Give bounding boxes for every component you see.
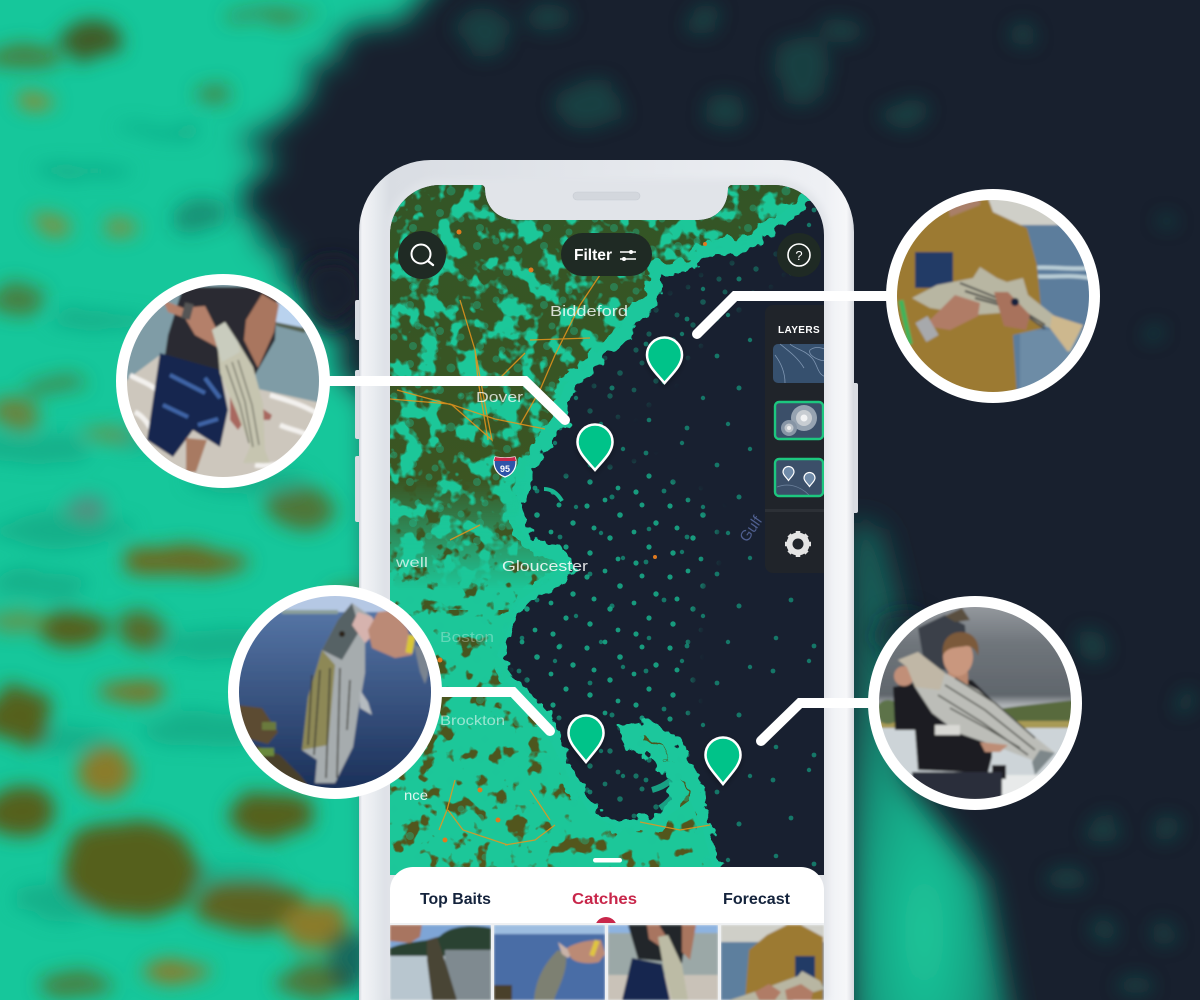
tab: Catches: Catches xyxy=(572,891,637,908)
layer thumbnail: heat circles xyxy=(775,402,823,439)
map label: Gulf: Gulf xyxy=(736,512,767,545)
layers label: LAYERS xyxy=(778,325,820,336)
layers panel xyxy=(765,308,824,564)
connector: photo 2 to pin xyxy=(697,296,886,334)
map label: well: well xyxy=(395,554,428,570)
connector: photo 4 to pin xyxy=(761,703,868,741)
settings gear xyxy=(785,531,811,557)
search button xyxy=(398,231,446,279)
map: ocean base xyxy=(390,185,824,875)
phone body xyxy=(355,160,858,1000)
help button: ? xyxy=(795,248,803,263)
map label: nce: nce xyxy=(404,787,428,803)
map: south land catch blotches xyxy=(390,470,715,875)
map pin 2 xyxy=(578,424,612,470)
catch thumbnail: angler in sweater xyxy=(721,925,824,1000)
map: coastline catch band xyxy=(497,190,815,875)
photo callout: angler on boat with large bass xyxy=(868,596,1082,810)
photo callout: bass held over blue water xyxy=(228,585,442,799)
map: scattered catch dots at sea xyxy=(509,208,816,866)
map label: Biddeford: Biddeford xyxy=(550,303,628,320)
highway shield 95 xyxy=(494,457,516,477)
map: land catch dots xyxy=(390,185,824,875)
filter button: Filter xyxy=(574,247,612,264)
map pin 3 xyxy=(568,716,604,762)
map pin 1 xyxy=(647,338,682,383)
photo callout: angler in mustard sweater xyxy=(886,188,1100,403)
layer thumbnail: pins xyxy=(775,459,823,496)
photo callout: angler on beach holding bass xyxy=(116,274,330,490)
catch thumbnail: bass over blue water xyxy=(494,925,605,1000)
map label: Gloucester: Gloucester xyxy=(502,558,588,575)
sheet handle xyxy=(593,858,622,862)
bottom sheet xyxy=(390,867,824,1000)
filter button xyxy=(561,233,652,276)
connector: photo 1 to pin xyxy=(330,381,565,420)
phone screen xyxy=(390,185,835,1000)
map: north land catch blotches xyxy=(390,185,815,610)
phone notch speaker xyxy=(573,192,640,200)
tab: Top Baits: Top Baits xyxy=(420,891,491,908)
layer thumbnail: contours xyxy=(773,344,824,383)
highway shield 95: 95 xyxy=(500,464,510,474)
connector: photo 3 to pin xyxy=(442,692,550,731)
map label: Boston: Boston xyxy=(440,629,494,646)
active tab marker xyxy=(596,917,616,923)
map label: Brockton: Brockton xyxy=(440,712,505,728)
map: roads xyxy=(390,260,710,845)
help button xyxy=(777,233,821,277)
catch thumbnail: bass by trees xyxy=(390,925,491,1000)
map: orange markers xyxy=(438,230,707,842)
tab: Forecast: Forecast xyxy=(723,891,790,908)
map pin 4 xyxy=(706,738,740,784)
map label: Dover: Dover xyxy=(476,389,523,406)
catch thumbnail: angler on beach xyxy=(608,925,718,1000)
map: land xyxy=(390,185,815,875)
